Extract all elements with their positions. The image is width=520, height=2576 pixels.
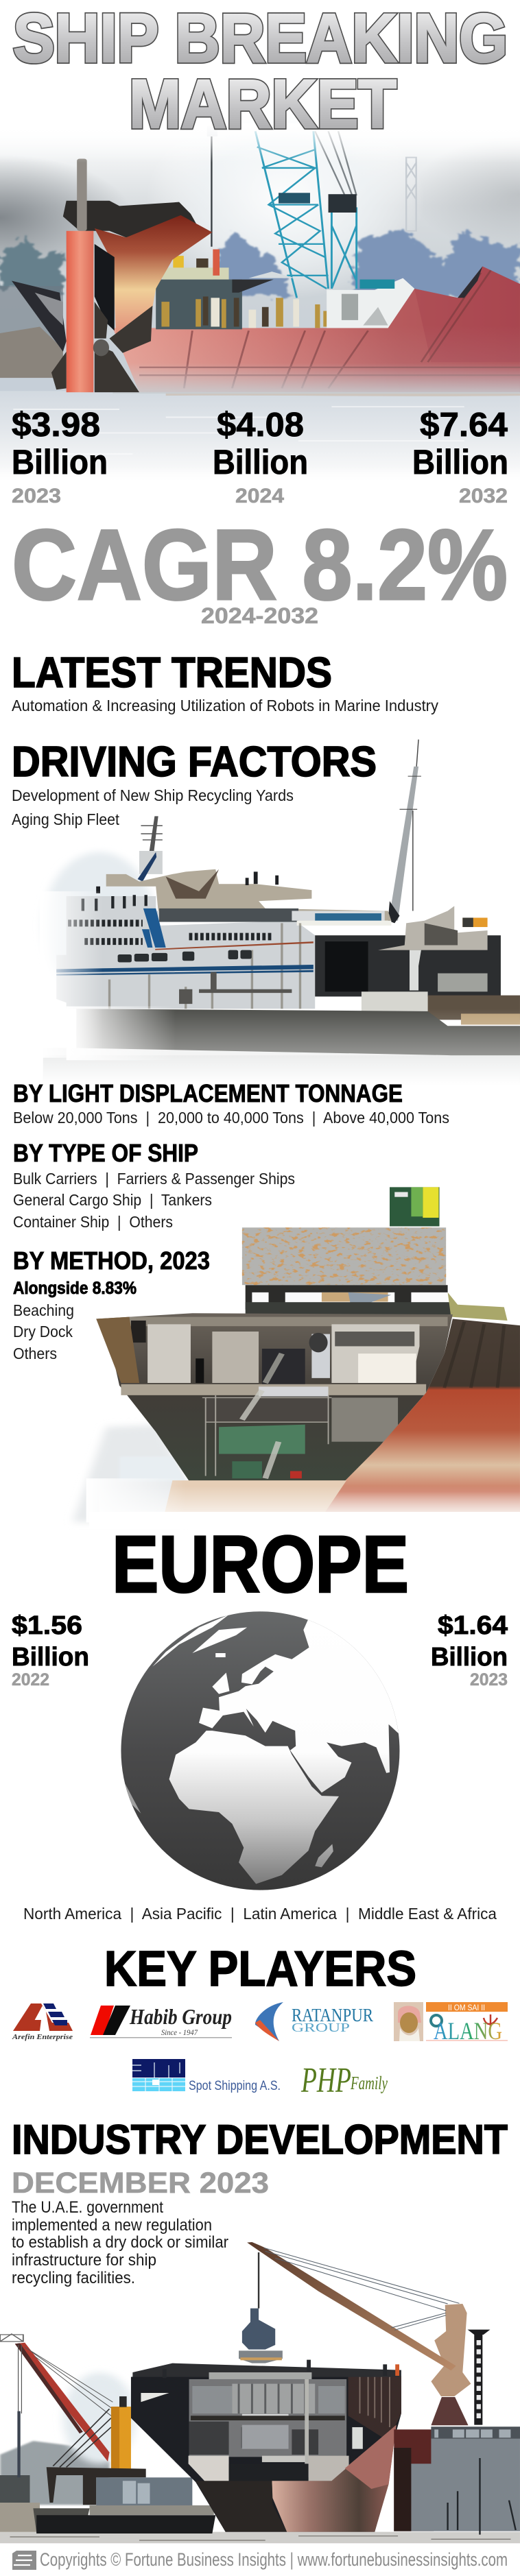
- lower white blotches: [189, 2456, 229, 2482]
- title: MARKET: [129, 66, 397, 143]
- deck cabin: [156, 280, 242, 329]
- workers: [161, 250, 329, 328]
- Greenland: [192, 1628, 247, 1653]
- section: industry development: DECEMBER 2023: [12, 2167, 269, 2200]
- haze background: [73, 1425, 186, 1522]
- CAGR period: 2024-2032: [201, 603, 318, 628]
- South America: [125, 1783, 141, 1814]
- top tower: [242, 2309, 275, 2350]
- stat: 2032 market size: $7.64: [420, 407, 508, 444]
- main ship dark block: [131, 2372, 401, 2532]
- section: driving factors: Aging Ship Fleet: [12, 810, 120, 828]
- left crane: [0, 2334, 113, 2477]
- deck band: [121, 1384, 426, 1395]
- Eurasia and Arabia: [199, 1619, 418, 1792]
- ship hull: [113, 266, 520, 392]
- stat: Europe 2022: Billion: [12, 1643, 89, 1672]
- water: [0, 2532, 520, 2543]
- pillar: [67, 231, 93, 392]
- logo: Spot Shipping: [132, 2059, 281, 2093]
- crane cab: [390, 1187, 440, 1227]
- section: industry development: to establish a dry dock or similar: [12, 2233, 228, 2252]
- section: by light displacement tonnage: [13, 1079, 449, 1127]
- distant haze: [43, 852, 156, 999]
- rust stains: [110, 923, 300, 1009]
- logo: Habib Group: Habib Group: [129, 2004, 232, 2029]
- section: by type of ship: Container Ship | Others: [13, 1213, 173, 1231]
- logo: Ratanpur Group: RATANPUR: [292, 2005, 373, 2025]
- section: latest trends: [12, 649, 438, 714]
- section: by type of ship: General Cargo Ship | Tankers: [13, 1191, 212, 1209]
- panel: hero photo of ship being broken: [0, 99, 520, 485]
- Africa: [169, 1731, 339, 1884]
- stat: Europe 2023: [431, 1611, 508, 1689]
- section: by method: Dry Dock: [13, 1323, 73, 1340]
- stat: Europe 2023: 2023: [470, 1670, 508, 1689]
- machinery: [327, 278, 414, 328]
- stat: 2032 market size: 2032: [459, 485, 508, 507]
- logo: PHP Family: PHP: [300, 2061, 351, 2100]
- dark open deck: [315, 935, 501, 996]
- Iceland: [215, 1653, 226, 1657]
- section: by method: [13, 1247, 210, 1362]
- lower machinery: [206, 1397, 329, 1422]
- section: industry development: recycling facilities.: [12, 2269, 135, 2287]
- stat: 2023 market size: $3.98: [12, 407, 100, 444]
- section: by type of ship: Bulk Carriers | Farriers & Passenger Ships: [13, 1170, 295, 1188]
- stat: 2024 market size: $4.08: [217, 407, 304, 444]
- other regions list: North America | Asia Pacific | Latin America | Middle East & Africa: [23, 1905, 497, 1923]
- stripes: [142, 908, 166, 948]
- bottom fade of cut ship photo: [89, 1512, 520, 1529]
- upper debris: [106, 869, 391, 921]
- Arctic Canada: [152, 1615, 229, 1667]
- Madagascar: [315, 1844, 333, 1867]
- deck line: [132, 2363, 401, 2377]
- right grey ship: [411, 2427, 520, 2531]
- crane lattice: [255, 131, 357, 298]
- interior of cut section: [96, 1313, 453, 1481]
- section: industry development: The U.A.E. government: [12, 2198, 163, 2217]
- section: by method: Others: [13, 1345, 57, 1362]
- heading: Europe: EUROPE: [112, 1519, 409, 1610]
- stat: 2023 market size: [12, 407, 108, 507]
- logo: Alang: [394, 2002, 508, 2045]
- stat: Europe 2022: [12, 1611, 89, 1689]
- hull side: [318, 1319, 520, 1522]
- panel: passenger ship photo: [40, 740, 520, 1085]
- water: [43, 1048, 520, 1085]
- rusty plate: [242, 1227, 446, 1285]
- left fin: [12, 280, 67, 352]
- stat: Europe 2022: $1.56: [12, 1611, 82, 1640]
- logo: Alang: ALANG: [434, 2017, 502, 2045]
- stat: 2023 market size: 2023: [12, 485, 61, 507]
- ladder mast: [468, 2330, 490, 2425]
- stat: Europe 2022: 2022: [12, 1670, 49, 1689]
- logo: Ratanpur Group: [255, 2002, 373, 2041]
- rudder fin: [95, 215, 212, 336]
- stat: Europe 2023: $1.64: [438, 1611, 508, 1640]
- stat: Europe 2023: Billion: [431, 1643, 508, 1672]
- section: driving factors: Development of New Ship Recycling Yards: [12, 786, 294, 804]
- bow hull: [272, 2425, 397, 2532]
- propeller: [51, 302, 152, 392]
- section: industry development: [12, 2117, 508, 2287]
- front mast: [141, 817, 163, 852]
- stat: 2032 market size: [412, 407, 508, 507]
- section: driving factors: [12, 738, 377, 828]
- logo: Alang: II OM SAI II: [448, 2003, 485, 2012]
- section: by type of ship: [13, 1139, 295, 1231]
- title: [13, 0, 508, 143]
- British Isles: [212, 1673, 230, 1694]
- title: MARKET: [129, 66, 397, 143]
- logo: Arefin Enterprise: [12, 2003, 73, 2041]
- tall mast: [389, 767, 418, 921]
- logo: Habib Group: Since - 1947: [161, 2027, 198, 2037]
- dark superstructure wreck: [63, 201, 198, 237]
- background haze: [0, 2441, 110, 2505]
- lower hull front: [163, 1480, 346, 1522]
- section: industry development: implemented a new regulation: [12, 2216, 212, 2235]
- yellow tower: [111, 2407, 131, 2472]
- section: by light displacement tonnage: Below 20,000 Tons | 20,000 to 40,000 Tons | Above 40,000 Tons: [13, 1109, 449, 1127]
- logo: PHP Family: Family: [350, 2073, 388, 2093]
- window rows: [68, 895, 274, 941]
- water band: [0, 378, 520, 394]
- logo: Spot Shipping: Spot Shipping A.S.: [189, 2079, 281, 2093]
- white panels: [147, 1324, 420, 1383]
- panel: cut ship section photo: [73, 1187, 520, 1522]
- stat: 2024 market size: [213, 407, 308, 507]
- section: by method: BY METHOD, 2023: [13, 1247, 210, 1275]
- icon: globe: [121, 1611, 418, 1890]
- continents: [123, 1615, 418, 1884]
- left fade: [40, 891, 103, 1058]
- logo: Habib Group: [90, 2004, 232, 2038]
- section: by light displacement tonnage: BY LIGHT DISPLACEMENT TONNAGE: [13, 1079, 403, 1107]
- people on deck: [163, 2360, 387, 2378]
- icon: Fortune Business Insights mark: [12, 2551, 36, 2570]
- logo: Ratanpur Group: GROUP: [292, 2021, 350, 2034]
- stat: 2023 market size: Billion: [12, 443, 108, 481]
- white superstructure: [67, 896, 315, 1009]
- logo: Arefin Enterprise: Arefin Enterprise: [12, 2033, 73, 2041]
- right dark building: [394, 2429, 434, 2531]
- section: by method: Beaching: [13, 1301, 74, 1319]
- supports: [246, 1285, 448, 1312]
- interior grey panels: [189, 2379, 346, 2457]
- crane hook line: [210, 131, 213, 247]
- trees in background: [0, 228, 520, 296]
- heading: key players: KEY PLAYERS: [104, 1942, 416, 1997]
- main boom: [247, 2242, 456, 2370]
- crane wires: [315, 131, 357, 195]
- right crane base: [431, 2397, 469, 2425]
- lower hull: [76, 1009, 520, 1055]
- top deck band: [130, 1317, 448, 1326]
- stat: 2032 market size: Billion: [412, 443, 508, 481]
- shore and left ground: [0, 286, 63, 381]
- section: industry development: infrastructure for ship: [12, 2251, 156, 2270]
- barge: [47, 2467, 146, 2505]
- side plate: [362, 991, 428, 1011]
- stat: 2024 market size: Billion: [213, 443, 308, 481]
- far pylon: [406, 158, 416, 231]
- section: latest trends: LATEST TRENDS: [12, 649, 332, 697]
- portrait: [394, 2002, 423, 2041]
- section: by type of ship: BY TYPE OF SHIP: [13, 1139, 198, 1167]
- top fade: [0, 123, 520, 162]
- pipe: [77, 159, 87, 231]
- panel: ship in dry dock photo: [0, 2242, 520, 2543]
- section: driving factors: DRIVING FACTORS: [12, 738, 377, 786]
- section: by method: Alongside 8.83%: [13, 1279, 137, 1298]
- stat: 2024 market size: 2024: [235, 485, 284, 507]
- section: latest trends: Automation & Increasing Utilization of Robots in Marine Industry: [12, 697, 438, 714]
- aft blocks: [378, 906, 488, 950]
